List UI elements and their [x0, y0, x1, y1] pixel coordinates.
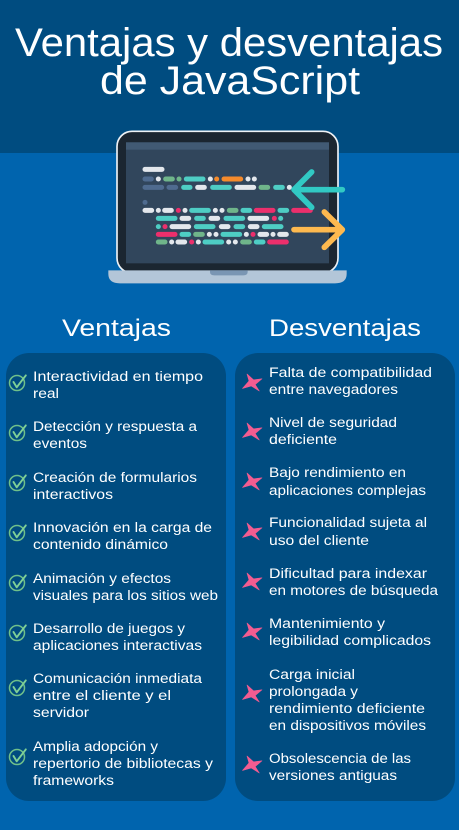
item: obsolescencia: Obsolescencia de las	[269, 751, 411, 767]
item: indexar: en motores de búsqueda	[269, 583, 438, 599]
title: de JavaScript	[100, 59, 360, 103]
item: comunicación: Comunicación inmediata	[33, 671, 202, 687]
arrow: orange right	[294, 212, 342, 247]
item: interactividad: real	[33, 386, 59, 402]
item: seguridad	[242, 415, 397, 448]
panel background right	[235, 353, 455, 801]
panel: desventajas	[235, 353, 455, 801]
item: rendimiento: Bajo rendimiento en	[269, 465, 406, 481]
item: compatibilidad: Falta de compatibilidad	[269, 365, 432, 381]
item: carga inicial: en dispositivos móviles	[269, 718, 426, 734]
item: obsolescencia	[242, 751, 411, 784]
code lines	[145, 169, 310, 242]
item: animación	[10, 571, 218, 604]
item: mantenimiento: Mantenimiento y	[269, 616, 386, 632]
illustration: laptop with code and arrows	[108, 131, 347, 283]
item: eventos	[10, 419, 197, 452]
item: rendimiento: aplicaciones complejas	[269, 483, 426, 499]
item: funcionalidad: Funcionalidad sujeta al	[269, 515, 427, 531]
item: rendimiento	[242, 465, 426, 499]
item: carga inicial: prolongada y	[269, 684, 359, 700]
item: eventos: Detección y respuesta a	[33, 419, 197, 435]
item: comunicación	[10, 671, 202, 721]
item: obsolescencia: versiones antiguas	[269, 768, 397, 784]
item: contenido dinámico: contenido dinámico	[33, 537, 168, 553]
item: animación: visuales para los sitios web	[33, 588, 218, 604]
item: formularios: Creación de formularios	[33, 470, 197, 486]
item: eventos: eventos	[33, 436, 87, 452]
item: seguridad: Nivel de seguridad	[269, 415, 397, 431]
screen	[126, 142, 329, 263]
item: comunicación: entre el cliente y el	[33, 688, 171, 704]
item: comunicación: servidor	[33, 705, 89, 721]
arrow: teal left	[294, 172, 342, 207]
item: animación: Animación y efectos	[33, 571, 171, 587]
item: carga inicial	[242, 667, 426, 734]
item: bibliotecas: repertorio de bibliotecas y	[33, 756, 214, 772]
item: contenido dinámico	[10, 520, 212, 553]
item: formularios: interactivos	[33, 487, 113, 503]
item: compatibilidad	[242, 365, 432, 398]
panel: ventajas	[6, 353, 226, 801]
item: mantenimiento: legibilidad complicados	[269, 633, 431, 649]
item: formularios	[10, 470, 197, 503]
laptop base	[108, 270, 347, 283]
item: interactividad	[10, 369, 203, 402]
item: funcionalidad	[242, 515, 427, 549]
panel background left	[6, 353, 226, 801]
item: bibliotecas: frameworks	[33, 773, 114, 789]
laptop notch	[210, 270, 248, 275]
item: indexar	[242, 566, 438, 599]
item: seguridad: deficiente	[269, 432, 337, 448]
item: juegos: Desarrollo de juegos y	[33, 621, 186, 637]
heading: Ventajas: Ventajas	[62, 315, 171, 342]
heading: Desventajas: Desventajas	[269, 315, 421, 342]
item: mantenimiento	[242, 616, 431, 649]
header band	[0, 0, 459, 153]
item: indexar: Dificultad para indexar	[269, 566, 427, 582]
laptop lid	[117, 131, 338, 273]
item: carga inicial: Carga inicial	[269, 667, 355, 683]
item: interactividad: Interactividad en tiempo	[33, 369, 203, 385]
title: Ventajas y desventajas	[15, 21, 443, 65]
item: funcionalidad: uso del cliente	[269, 533, 369, 549]
item: compatibilidad: entre navegadores	[269, 382, 398, 398]
item: bibliotecas	[10, 739, 214, 789]
title	[15, 21, 443, 103]
item: contenido dinámico: Innovación en la carga de	[33, 520, 212, 536]
item: juegos	[10, 621, 202, 654]
item: juegos: aplicaciones interactivas	[33, 638, 202, 654]
item: carga inicial: rendimiento deficiente	[269, 701, 425, 717]
item: bibliotecas: Amplia adopción y	[33, 739, 159, 755]
screen top bar	[126, 142, 329, 150]
